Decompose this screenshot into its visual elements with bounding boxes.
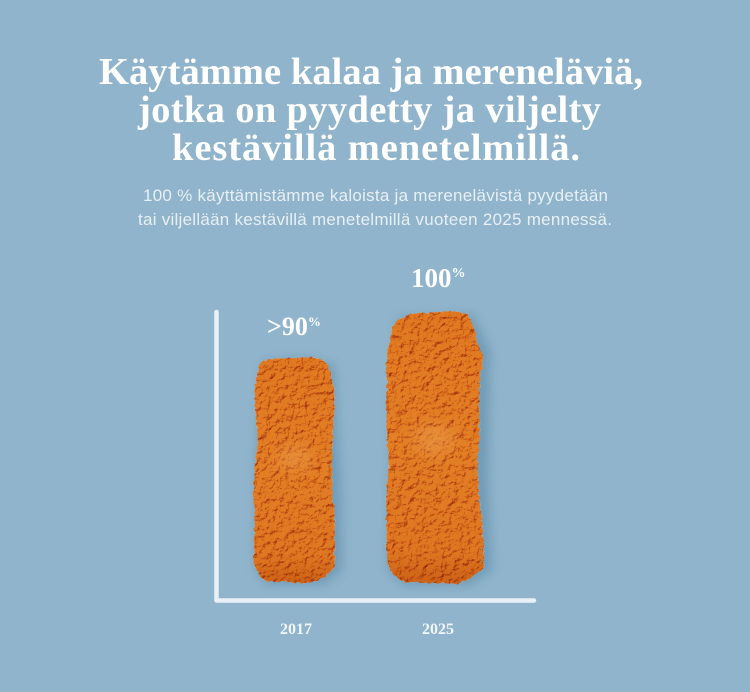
year label: 2017: 2017 xyxy=(280,621,312,638)
value label: >90%: >90 xyxy=(267,312,308,341)
year label: 2025: 2025 xyxy=(422,621,454,638)
value label: >90%: % xyxy=(308,314,321,329)
title xyxy=(99,51,643,169)
bar: 2025 fish stick xyxy=(386,311,492,585)
subtitle text: tai viljellään kestävillä menetelmillä vuoteen 2025 mennessä. xyxy=(138,210,612,229)
chart axes xyxy=(216,312,534,600)
subtitle text xyxy=(138,186,612,229)
title: jotka on pyydetty ja viljelty xyxy=(137,89,601,131)
bar: 2017 fish stick xyxy=(253,358,342,584)
title: kestävillä menetelmillä. xyxy=(172,127,580,169)
subtitle text: 100 % käyttämistämme kaloista ja merenelävistä pyydetään xyxy=(143,186,608,205)
value label: 100%: % xyxy=(452,266,466,281)
value label: 100%: 100 xyxy=(411,263,452,293)
title: Käytämme kalaa ja mereneläviä, xyxy=(99,51,643,93)
